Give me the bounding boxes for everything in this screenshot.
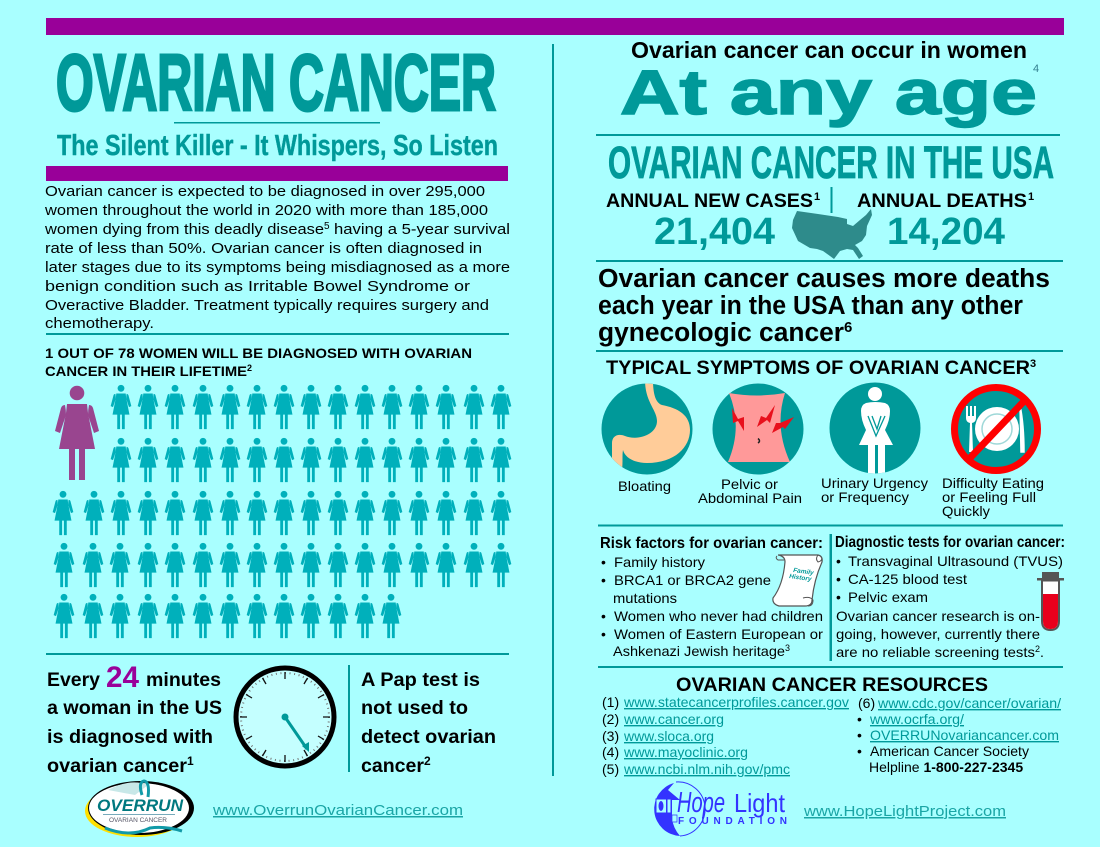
logo: hope light foundation: Hope [677, 787, 725, 819]
intro paragraph: Ovarian cancer is expected to be diagnosed in over 295,000 [45, 183, 485, 200]
panel: diagnostic tests: • [836, 571, 841, 587]
intro paragraph: later stages due to its symptoms being misdiagnosed as a more [45, 259, 510, 276]
stat: annual new cases: 21,404 [654, 211, 775, 253]
resources list: left: www.ncbi.nlm.nih.gov/pmc [623, 761, 790, 777]
main title: OVARIAN CANCER [56, 38, 496, 127]
resources list: right: American Cancer Society [870, 743, 1029, 759]
intro paragraph: Overactive Bladder. Treatment typically requires surgery and [45, 297, 489, 314]
resources list: left: www.statecancerprofiles.cancer.gov [623, 694, 849, 710]
panel: risk factors: • [601, 626, 606, 642]
resources list: right: www.ocrfa.org/ [869, 711, 964, 727]
callout: every 24 minutes [47, 661, 222, 777]
intro paragraph: rate of less than 50%. Ovarian cancer is often diagnosed in [45, 240, 482, 257]
stat: annual new cases: ANNUAL NEW CASES [606, 191, 813, 212]
intro paragraph [44, 183, 510, 332]
icon: test tube [1037, 572, 1064, 630]
resources list: right: OVERRUNovariancancer.com [870, 727, 1059, 743]
symptom: urinary urgency: Urinary Urgency [821, 475, 928, 491]
panel: risk factors: 3 [785, 643, 790, 653]
logo: overrun: OVARIAN CANCER [109, 817, 167, 824]
panel: diagnostic tests: CA-125 blood test [848, 571, 967, 587]
deaths statement: each year in the USA than any other [598, 292, 1023, 320]
stat: annual deaths: 14,204 [887, 211, 1005, 253]
panel: diagnostic tests: going, however, currently there [836, 626, 1040, 642]
callout: pap test: detect ovarian [361, 727, 496, 748]
statistic heading: CANCER IN THEIR LIFETIME [45, 363, 247, 379]
callout: every 24 minutes: ovarian cancer [47, 756, 188, 777]
resources list: right: Helpline 1-800-227-2345 [869, 759, 1023, 775]
symptom: difficulty eating: or Feeling Full [942, 489, 1036, 505]
symptom: bloating: Bloating [618, 478, 671, 494]
resources list: left: (1) [602, 694, 619, 710]
logo: overrun: OVERRUN [97, 796, 184, 815]
deaths statement: Ovarian cancer causes more deaths [598, 265, 1050, 293]
resources list: left: www.cancer.org [623, 711, 724, 727]
stat: annual deaths [857, 191, 1034, 253]
symptom: pelvic pain: Abdominal Pain [698, 490, 802, 506]
purple bar under subtitle [46, 166, 508, 181]
deaths statement: 6 [844, 319, 852, 336]
link: hope light website: www.HopeLightProject.com [803, 803, 1006, 820]
column divider [552, 44, 554, 776]
resources list: left: (4) [602, 744, 619, 760]
panel: risk factors: • [601, 572, 606, 588]
callout: every 24 minutes: a woman in the US [47, 698, 222, 719]
callout: pap test: not used to [361, 698, 468, 719]
intro paragraph: benign condition such as Irritable Bowel Syndrome or [45, 278, 470, 295]
statistic heading: 2 [247, 363, 252, 373]
statistic heading: 1 OUT OF 78 WOMEN WILL BE DIAGNOSED WITH OVARIAN [45, 345, 472, 361]
panel: diagnostic tests: Diagnostic tests for ovarian cancer: [835, 534, 1065, 551]
intro paragraph: women throughout the world in 2020 with more than 185,000 [44, 202, 488, 219]
symptom: bloating [602, 380, 692, 494]
panel: risk factors: Ashkenazi Jewish heritage [613, 643, 785, 659]
stat: annual deaths: 1 [1028, 191, 1034, 203]
resources list: right: • [857, 727, 862, 743]
deaths statement [598, 265, 1050, 347]
at any age headline: At any age [620, 58, 1037, 128]
symptom: urinary urgency: or Frequency [821, 489, 909, 505]
stat: annual deaths: ANNUAL DEATHS [857, 191, 1027, 212]
resources list: left: www.mayoclinic.org [623, 744, 748, 760]
deaths statement: gynecologic cancer [598, 319, 844, 347]
panel: risk factors: • [601, 608, 606, 624]
panel: risk factors: • [601, 554, 606, 570]
panel: diagnostic tests [835, 534, 1065, 660]
intro paragraph: 5 [324, 221, 330, 232]
statistic heading [45, 345, 472, 379]
icon: family history scroll: History [789, 573, 812, 583]
intro paragraph: chemotherapy. [45, 315, 154, 332]
panel: diagnostic tests: Transvaginal Ultrasound (TVUS) [848, 553, 1063, 569]
resources list: right: • [857, 711, 862, 727]
pictogram: 77 teal women [53, 385, 511, 638]
panel: risk factors: Women of Eastern European or [614, 626, 823, 642]
callout: every 24 minutes: 1 [187, 754, 194, 768]
right heading line: Ovarian cancer can occur in women [631, 37, 1027, 63]
icon: purple woman, the 1 in 78 [55, 386, 99, 480]
intro paragraph: having a 5-year survival [334, 221, 510, 238]
panel: diagnostic tests: Ovarian cancer research is on- [836, 608, 1040, 624]
panel: risk factors: Women who never had children [614, 608, 823, 624]
resources list: right [857, 695, 1061, 775]
icon: family history scroll: Family [793, 567, 814, 577]
resources list: left: (2) [602, 711, 619, 727]
resources list: left [602, 694, 849, 777]
symptoms heading: 3 [1030, 358, 1036, 370]
icon: usa map [792, 209, 872, 259]
resources heading: OVARIAN CANCER RESOURCES [676, 675, 988, 696]
panel: risk factors: mutations [613, 590, 677, 606]
stat: annual new cases [606, 191, 820, 253]
panel: diagnostic tests: . [1040, 644, 1044, 660]
symptom: urinary urgency [821, 382, 928, 505]
resources list: right: www.cdc.gov/cancer/ovarian/ [877, 695, 1061, 711]
callout: pap test: 2 [424, 754, 431, 768]
resources list: left: www.sloca.org [623, 728, 714, 744]
callout: every 24 minutes: 24 [106, 661, 139, 694]
symptom: pelvic pain [698, 384, 804, 506]
link: overrun website: www.OverrunOvarianCancer.com [212, 802, 463, 819]
symptom: difficulty eating [942, 388, 1044, 519]
icon: family history scroll [773, 555, 822, 606]
callout: pap test [361, 670, 496, 777]
callout: every 24 minutes: is diagnosed with [47, 727, 213, 748]
logo: hope light foundation: Light [734, 788, 786, 818]
logo: overrun [85, 781, 194, 837]
callout: every 24 minutes: minutes [146, 670, 221, 691]
symptom: pelvic pain: Pelvic or [721, 476, 778, 492]
icon: clock [236, 668, 334, 766]
symptoms heading: TYPICAL SYMPTOMS OF OVARIAN CANCER [606, 358, 1030, 379]
resources list: left: (5) [602, 761, 619, 777]
intro paragraph: women dying from this deadly disease [44, 221, 324, 238]
panel: diagnostic tests: 2 [1035, 644, 1040, 654]
symptom: difficulty eating: Quickly [942, 503, 990, 519]
top banner bar [46, 18, 1064, 35]
resources list: right: • [857, 743, 862, 759]
panel: diagnostic tests: • [836, 553, 841, 569]
callout: every 24 minutes: Every [47, 670, 100, 691]
symptom: difficulty eating: Difficulty Eating [942, 475, 1044, 491]
panel: risk factors: BRCA1 or BRCA2 gene [614, 572, 771, 588]
panel: diagnostic tests: Pelvic exam [848, 589, 928, 605]
footnote marker: 4 [1033, 63, 1039, 75]
resources list: left: (3) [602, 728, 619, 744]
panel: risk factors [600, 535, 823, 659]
logo: hope light foundation [654, 782, 787, 836]
panel: diagnostic tests: • [836, 589, 841, 605]
panel: diagnostic tests: are no reliable screening tests [836, 644, 1035, 660]
panel: risk factors: Family history [614, 554, 705, 570]
panel: risk factors: Risk factors for ovarian cancer: [600, 535, 823, 552]
logo: hope light foundation: FOUNDATION [678, 816, 787, 827]
stat: annual new cases: 1 [814, 191, 820, 203]
callout: pap test: A Pap test is [361, 670, 480, 691]
subtitle: The Silent Killer - It Whispers, So Listen [57, 130, 498, 162]
callout: pap test: cancer [361, 756, 425, 777]
resources list: right: (6) [858, 695, 875, 711]
